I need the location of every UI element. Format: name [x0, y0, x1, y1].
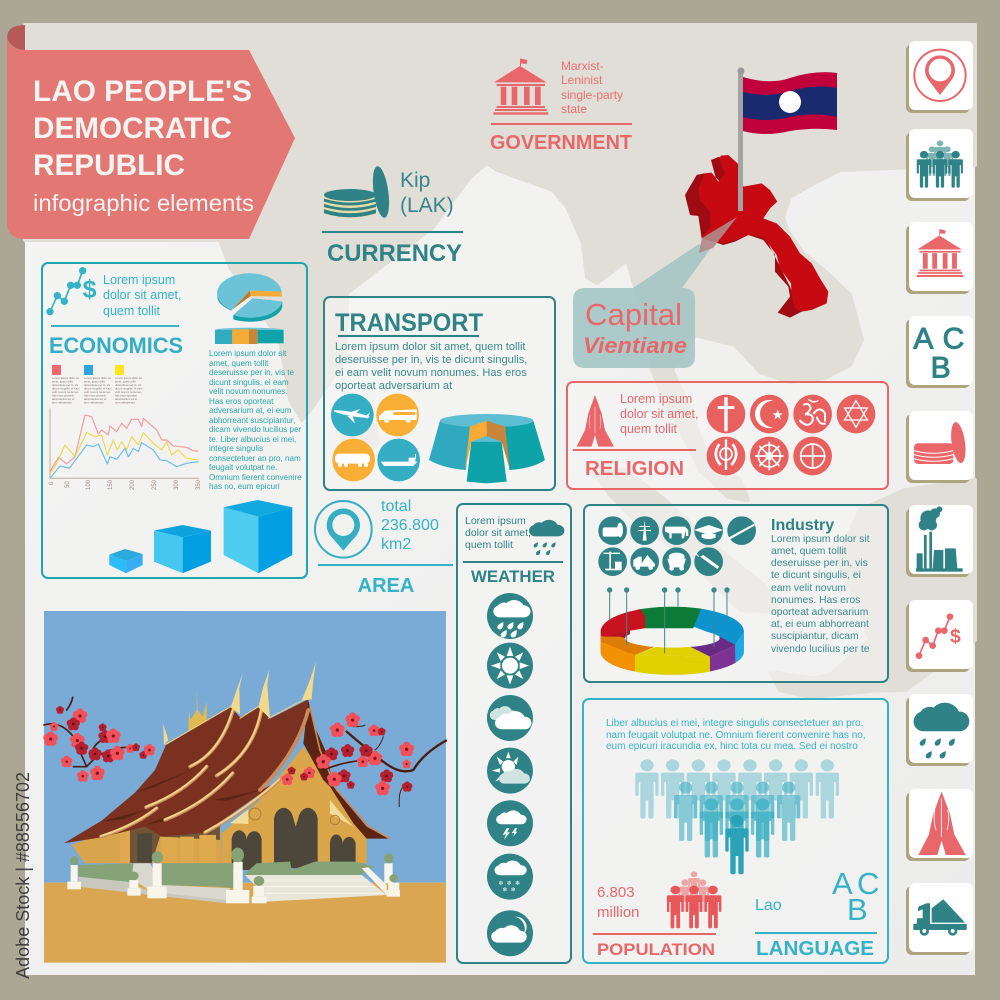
icon: praying hands [577, 395, 614, 447]
icon: alphabet letters: C [857, 866, 879, 901]
panel: weather: Lorem ipsum [465, 515, 526, 527]
panel: industry [584, 505, 888, 682]
icons: sidebar upper [913, 50, 968, 464]
panel: transport: ei eam velit novum nonumes. Has eros [335, 367, 527, 379]
panel: economics: consectetuer an pro, nam [209, 454, 301, 463]
area block: AREA [358, 575, 414, 597]
legend: deseruisse per in, vis [84, 383, 111, 387]
panel: population and language: nam feugait volutpat ne. Omnium fierent convenire has no, [606, 730, 866, 741]
panel: industry: nonumes. Has eros [771, 595, 860, 606]
panel: economics: dicunt singulis, ei eam [209, 378, 289, 387]
legend: eum abhorreant [115, 400, 135, 404]
icon: rain cloud [529, 520, 564, 555]
panel: weather: WEATHER [471, 567, 555, 586]
pie chart [215, 273, 284, 344]
capital callout: Capital [585, 297, 682, 332]
flag on pole [738, 68, 837, 211]
ring chart [597, 587, 747, 680]
icon: alphabet letters: A [832, 866, 853, 901]
panel: religion: quem tollit [620, 422, 677, 436]
government block [490, 58, 632, 154]
legend: Lorem ipsum dolor sit [52, 376, 79, 380]
panel: population and language: Lao [755, 897, 782, 914]
icons: weather forecast: ❄ [498, 880, 503, 887]
icons: sidebar upper: C [943, 322, 964, 355]
panel: religion: dolor sit amet, [620, 407, 699, 421]
panel: industry: amet, quem tollit [771, 546, 847, 557]
legend: dicunt singulis, ei eam [115, 386, 143, 390]
line chart: 350 [196, 479, 202, 490]
legend [52, 365, 143, 404]
panel: population and language: Liber albucius ei mei, integre singulis consectetuer an pro, [606, 718, 863, 729]
panel: population and language: POPULATION [597, 940, 715, 959]
legend: dicunt singulis, ei eam [84, 386, 112, 390]
legend: has eros oporteat [115, 394, 137, 398]
panel: weather [457, 504, 571, 963]
icons: sidebar upper: A [913, 322, 933, 355]
icons: weather forecast [487, 593, 533, 956]
cherry branch right [281, 712, 446, 807]
panel: industry: at, ei eum abhorreant [771, 619, 869, 630]
legend: amet, quem tollit [115, 380, 136, 384]
title banner: DEMOCRATIC [33, 112, 232, 145]
pie chart: transport [429, 414, 545, 483]
currency block: CURRENCY [327, 240, 462, 267]
icons: religious symbols [707, 395, 875, 475]
panel: religion: Lorem ipsum [620, 392, 692, 406]
panel: religion: RELIGION [585, 458, 684, 480]
legend: adversarium at, ei [52, 397, 75, 401]
panel: transport: oporteat adversarium at [335, 380, 452, 392]
panel: economics: te. Liber albucius ei mei, [209, 435, 296, 444]
panel: weather: dolor sit amet, [465, 527, 531, 539]
title banner [7, 25, 295, 239]
panel: economics: amet, quem tollit [209, 359, 269, 368]
icons: weather forecast: ❄ [507, 880, 512, 887]
panel: transport: deseruisse per in, vis te dicunt singulis, [335, 354, 527, 366]
government block: Marxist- [561, 59, 604, 73]
icons: weather forecast: ❄ [502, 887, 507, 894]
legend: velit novum nonumes [84, 390, 111, 394]
panel: industry: vivendo lucilius per te [771, 644, 870, 655]
legend: has eros oporteat [84, 394, 106, 398]
line chart: 150 [108, 479, 114, 490]
legend: velit novum nonumes [52, 390, 79, 394]
title banner: infographic elements [33, 190, 254, 216]
panel: population and language: eum epicuri iracundia ex, hinc tota cu mea. Sed ei nostro [606, 741, 858, 752]
cherry branch left [43, 697, 155, 782]
line chart: 0 [49, 481, 55, 485]
icons: sidebar lower: $ [950, 627, 961, 648]
icons: weather forecast: ❄ [511, 887, 516, 894]
legend: Lorem ipsum dolor sit [84, 376, 111, 380]
panel: economics: has no, eum epicuri [209, 482, 280, 491]
panel: transport: TRANSPORT [335, 309, 483, 337]
panel: transport: Lorem ipsum dolor sit amet, quem tollit [335, 341, 526, 353]
crowd pictogram [635, 759, 839, 874]
panel: population and language [583, 699, 888, 963]
sidebar icon tiles [906, 41, 973, 955]
map of Laos [685, 155, 828, 318]
panel: weather: quem tollit [465, 539, 513, 551]
government block: Leninist [561, 73, 603, 87]
panel: industry: oporteat adversarium [771, 607, 868, 618]
panel: economics: Omnium fierent convenire [209, 473, 302, 482]
icon: red people group [667, 871, 721, 928]
panel: economics: adversarium at, ei eum [209, 406, 292, 415]
line chart: 250 [152, 479, 158, 490]
panel: industry: suscipiantur, dicam [771, 631, 859, 642]
panel: industry: te dicunt singulis, ei [771, 570, 861, 581]
panel: economics: Lorem ipsum dolor sit [209, 349, 287, 358]
icon: economy trend [46, 267, 97, 315]
panel: economics: integre singulis [209, 444, 263, 453]
cubes [109, 500, 292, 573]
image credit: Adobe Stock | #88556702 [13, 772, 33, 979]
panel: economics [42, 263, 307, 578]
line chart: 300 [174, 479, 180, 490]
panel: economics: Lorem ipsum [103, 273, 175, 287]
line chart: 100 [86, 479, 92, 490]
panel: religion [567, 382, 888, 489]
currency block: (LAK) [400, 194, 454, 217]
panel: economics: Has eros oporteat [209, 397, 274, 406]
line chart [49, 408, 202, 490]
legend: amet, quem tollit [52, 380, 73, 384]
panel: industry: Industry [771, 517, 834, 534]
panel: population and language: LANGUAGE [756, 938, 874, 960]
legend: adversarium at, ei [84, 397, 107, 401]
icons: sidebar lower [913, 506, 969, 936]
temple illustration [43, 611, 446, 963]
legend: deseruisse per in, vis [52, 383, 79, 387]
panel: economics: quem tollit [103, 304, 160, 318]
panel: economics: velit novum nonumes. [209, 387, 288, 396]
panel: industry: deseruisse per in, vis [771, 558, 868, 569]
area block: 236.800 [381, 517, 439, 534]
legend: dicunt singulis, ei eam [52, 386, 80, 390]
panel: economics: feugait volutpat ne. [209, 463, 277, 472]
legend: has eros oporteat [52, 394, 74, 398]
icon: economy trend: $ [83, 276, 97, 304]
legend: adversarium at, ei [115, 397, 138, 401]
capital callout [573, 217, 737, 368]
currency block: Kip [400, 169, 430, 192]
panel: population and language: 6.803 [597, 884, 635, 901]
area block: total [381, 498, 411, 515]
currency block [322, 165, 463, 267]
icons: sidebar upper: B [931, 352, 951, 385]
government block: state [561, 102, 587, 116]
panel: economics: dicam vivendo lucilius per [209, 425, 302, 434]
panel: population and language: million [597, 904, 640, 921]
icons: weather forecast: ❄ [515, 880, 520, 887]
panel: economics: dolor sit amet, [103, 288, 182, 302]
government block: GOVERNMENT [490, 132, 632, 154]
legend: deseruisse per in, vis [115, 383, 142, 387]
legend: Lorem ipsum dolor sit [115, 376, 142, 380]
panel: economics: ECONOMICS [49, 333, 183, 358]
icons: industry sectors [598, 516, 756, 576]
icons: transport [331, 394, 420, 481]
legend: eum abhorreant [52, 400, 72, 404]
panel: transport [324, 297, 555, 490]
area block: km2 [381, 536, 411, 553]
title banner: REPUBLIC [33, 149, 185, 182]
legend: amet, quem tollit [84, 380, 105, 384]
icon: alphabet letters [832, 866, 879, 927]
legend: eum abhorreant [84, 400, 104, 404]
title banner: LAO PEOPLE'S [33, 75, 252, 108]
government block: single-party [561, 88, 623, 102]
area block [315, 498, 453, 597]
panel: economics: deseruisse per in, vis te [209, 368, 295, 377]
panel: economics: abhorreant suscipiantur, [209, 416, 295, 425]
panel: industry: eam velit novum [771, 583, 846, 594]
capital callout: Vientiane [583, 333, 687, 358]
panel: industry: Lorem ipsum dolor sit [771, 534, 870, 545]
line chart: 50 [65, 481, 71, 488]
legend: velit novum nonumes [115, 390, 142, 394]
line chart: 200 [130, 479, 136, 490]
icon: alphabet letters: B [847, 892, 868, 927]
